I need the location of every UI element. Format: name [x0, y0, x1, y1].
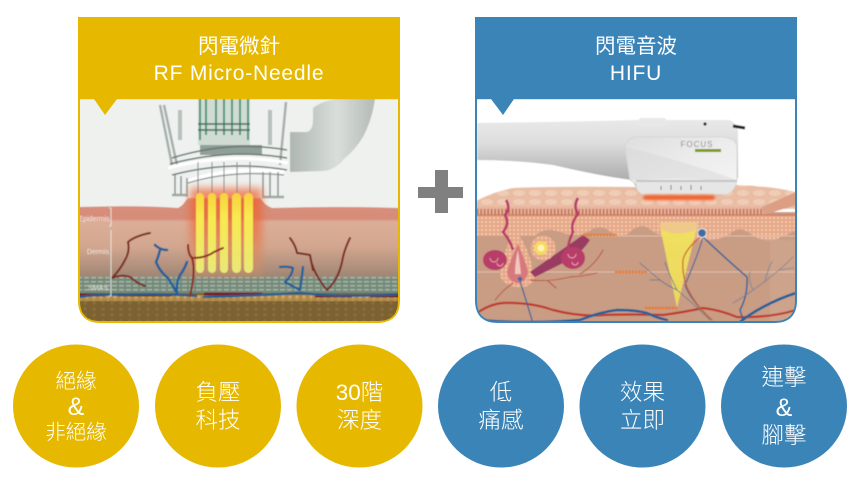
illustration: HIFU handpiece on skin — [476, 99, 796, 324]
layer labels: Epidermis — [78, 216, 110, 223]
skin surface — [476, 185, 796, 209]
fat cluster — [530, 236, 556, 260]
skin base — [476, 212, 796, 324]
sebaceous gland and follicle — [483, 198, 590, 287]
sweat ducts — [503, 200, 513, 250]
feature circle: 負壓科技: 科技 — [195, 408, 241, 433]
feature circle: 連擊 & 腳擊: & — [776, 394, 793, 422]
feature circle: 30階深度: 深度 — [337, 408, 382, 433]
glands — [483, 250, 507, 270]
handpiece elbow — [290, 99, 375, 172]
feature circle: 負壓科技: 負壓 — [195, 380, 241, 405]
heading: 閃電音波 — [595, 35, 677, 58]
transparent needle head — [155, 99, 291, 198]
header bar — [475, 17, 797, 99]
plus sign — [418, 170, 463, 213]
feature circle: 效果立即 — [580, 344, 706, 468]
layer labels: SMAS — [88, 285, 108, 292]
panel frame — [78, 17, 400, 323]
orange contact glow — [643, 195, 715, 200]
heading — [595, 35, 677, 85]
nerve node — [698, 228, 706, 238]
focused ultrasound beam — [660, 227, 697, 308]
heading — [154, 35, 324, 85]
handpiece — [477, 118, 745, 194]
feature circle: 連擊 & 腳擊: 連擊 — [761, 365, 807, 390]
feature circle: 絕緣 & 非絕緣: 絕緣 — [56, 370, 96, 393]
muscle band — [530, 235, 590, 277]
header bar — [78, 17, 400, 99]
feature circle: 低痛感: 低 — [490, 380, 512, 405]
layer labels — [78, 208, 111, 296]
illustration: micro-needle device on skin — [78, 99, 399, 323]
heading: RF Micro-Needle — [154, 62, 324, 85]
heading: HIFU — [610, 62, 662, 85]
blood vessels — [112, 233, 350, 296]
feature circle: 30階深度 — [296, 344, 422, 468]
cell layer waves — [476, 215, 796, 241]
panel: HIFU — [475, 17, 797, 324]
layer labels: Dermis — [87, 249, 110, 256]
feature circle: 絕緣 & 非絕緣: 非絕緣 — [45, 421, 107, 444]
thermal points — [583, 235, 678, 308]
feature circle: 效果立即: 效果 — [620, 380, 665, 405]
nerves and vessels — [477, 237, 796, 322]
heading: 閃電微針 — [198, 35, 280, 58]
pointer — [94, 99, 117, 115]
feature circle: 負壓科技 — [155, 344, 281, 468]
feature circle: 效果立即: 立即 — [620, 408, 665, 433]
feature circle: 連擊 & 腳擊: 腳擊 — [761, 423, 807, 448]
striped epidermis layer — [476, 207, 764, 215]
energy glow columns — [190, 162, 262, 276]
feature circle: 絕緣 & 非絕緣 — [13, 344, 139, 468]
feature circle: 絕緣 & 非絕緣: & — [68, 393, 85, 421]
feature circle: 低痛感: 痛感 — [478, 408, 524, 433]
panel frame — [475, 17, 797, 323]
skin layers — [79, 197, 399, 323]
pointer — [491, 99, 514, 115]
panel: RF Micro-Needle — [78, 17, 400, 323]
feature circle: 連擊 & 腳擊 — [721, 344, 847, 468]
feature circle: 低痛感 — [438, 344, 564, 468]
feature circle: 30階深度: 30階 — [336, 380, 383, 405]
faint dermis guides — [476, 236, 796, 272]
handpiece: FOCUS — [680, 140, 714, 149]
